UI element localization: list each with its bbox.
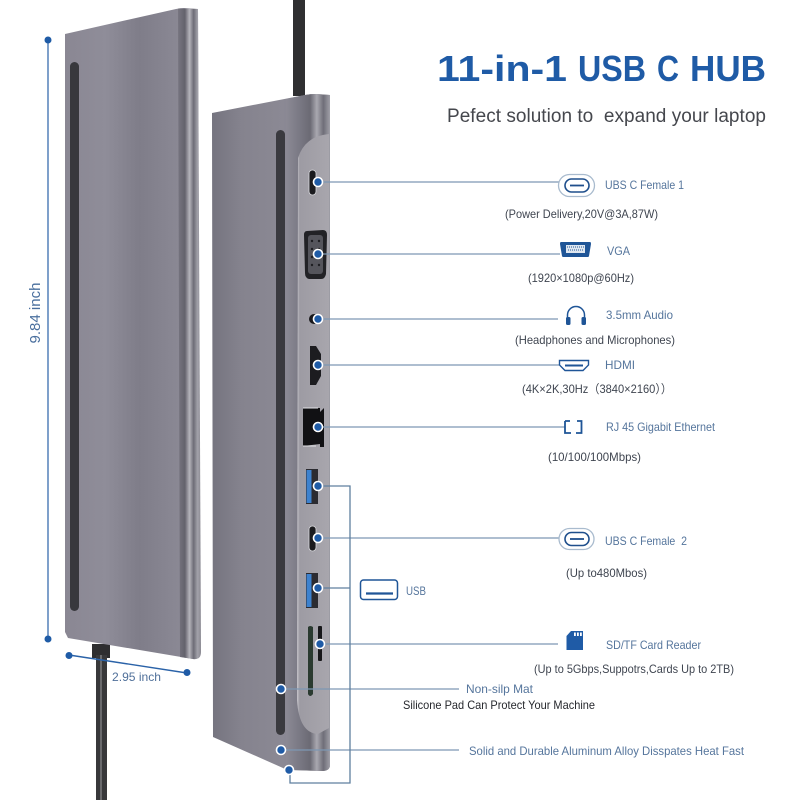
right hub edge — [286, 94, 330, 771]
callout dots — [276, 178, 324, 774]
port: RJ45 — [303, 408, 324, 447]
device: right hub port view — [212, 0, 330, 771]
title: HUB — [690, 48, 766, 89]
height label: 9.84 inch — [27, 283, 44, 343]
right hub cable — [293, 0, 305, 96]
port: audio — [309, 314, 319, 324]
title: 11-in-1 — [437, 48, 567, 89]
detail: (Power Delivery,20V@3A,87W) — [505, 207, 658, 221]
label: USB — [406, 584, 426, 598]
dimension: height — [27, 36, 52, 642]
icon: headphones — [566, 306, 586, 325]
icon: USB-C — [559, 528, 594, 550]
icon: ethernet — [565, 421, 582, 433]
port: SD card — [308, 626, 313, 696]
port: USB-A 2 — [306, 573, 318, 608]
subtitle: Pefect solution to expand your laptop — [447, 106, 766, 127]
label: 3.5mm Audio — [606, 308, 673, 322]
label: HDMI — [605, 358, 635, 372]
icon: VGA — [560, 242, 591, 257]
right hub port panel — [297, 134, 329, 734]
detail: (Up to 5Gbps,Suppotrs,Cards Up to 2TB) — [534, 662, 734, 676]
icon: USB — [360, 580, 398, 600]
width line — [66, 652, 190, 676]
width label: 2.95 inch — [112, 670, 161, 684]
label: VGA — [607, 244, 630, 258]
label: RJ 45 Gigabit Ethernet — [606, 420, 716, 434]
title: C — [657, 48, 679, 89]
callout: RJ45 — [548, 420, 716, 464]
callout lines — [281, 182, 565, 750]
height line — [44, 36, 52, 642]
callout: aluminum: Solid and Durable Aluminum Alloy Disspates Heat Fast — [469, 744, 745, 758]
title: USB — [578, 48, 646, 89]
detail: (Headphones and Microphones) — [515, 333, 675, 347]
detail: (10/100/100Mbps) — [548, 450, 641, 464]
icon: USB-C — [558, 174, 594, 196]
right hub slot — [276, 130, 285, 735]
label: UBS C Female 2 — [605, 534, 687, 548]
port: USB-C 2 — [309, 526, 316, 551]
detail: (4K×2K,30Hz（3840×2160）） — [522, 382, 672, 396]
callout: USB C Female 2 — [559, 528, 687, 580]
icon: SD card — [566, 631, 583, 650]
device: left hub rear view — [65, 8, 201, 800]
left hub slot — [70, 62, 79, 611]
detail: (1920×1080p@60Hz) — [528, 271, 634, 285]
callout: 3.5mm Audio — [515, 306, 675, 347]
left hub cable — [92, 644, 110, 800]
port: USB-A 1 — [306, 469, 318, 504]
right hub body — [212, 94, 330, 771]
callout: USB C Female 1 — [505, 174, 684, 221]
callout: SD/TF — [534, 631, 734, 676]
port: microSD — [318, 626, 322, 661]
dimension: width — [66, 652, 190, 684]
title — [437, 48, 766, 89]
left hub edge — [178, 8, 201, 659]
port: VGA — [304, 230, 327, 279]
USB bracket connector — [290, 486, 350, 783]
label: UBS C Female 1 — [605, 178, 684, 192]
callout: VGA — [528, 242, 634, 285]
label: Non-silp Mat — [466, 682, 534, 696]
port: HDMI — [310, 346, 321, 385]
callout: HDMI — [522, 358, 672, 396]
icon: HDMI — [560, 360, 588, 370]
left hub body — [65, 8, 200, 659]
callout: non-slip mat — [403, 682, 595, 712]
detail: (Up to480Mbos) — [566, 566, 647, 580]
callout: USB — [360, 580, 426, 600]
port: USB-C 1 — [309, 170, 316, 195]
label: SD/TF Card Reader — [606, 638, 701, 652]
detail: Silicone Pad Can Protect Your Machine — [403, 698, 595, 712]
